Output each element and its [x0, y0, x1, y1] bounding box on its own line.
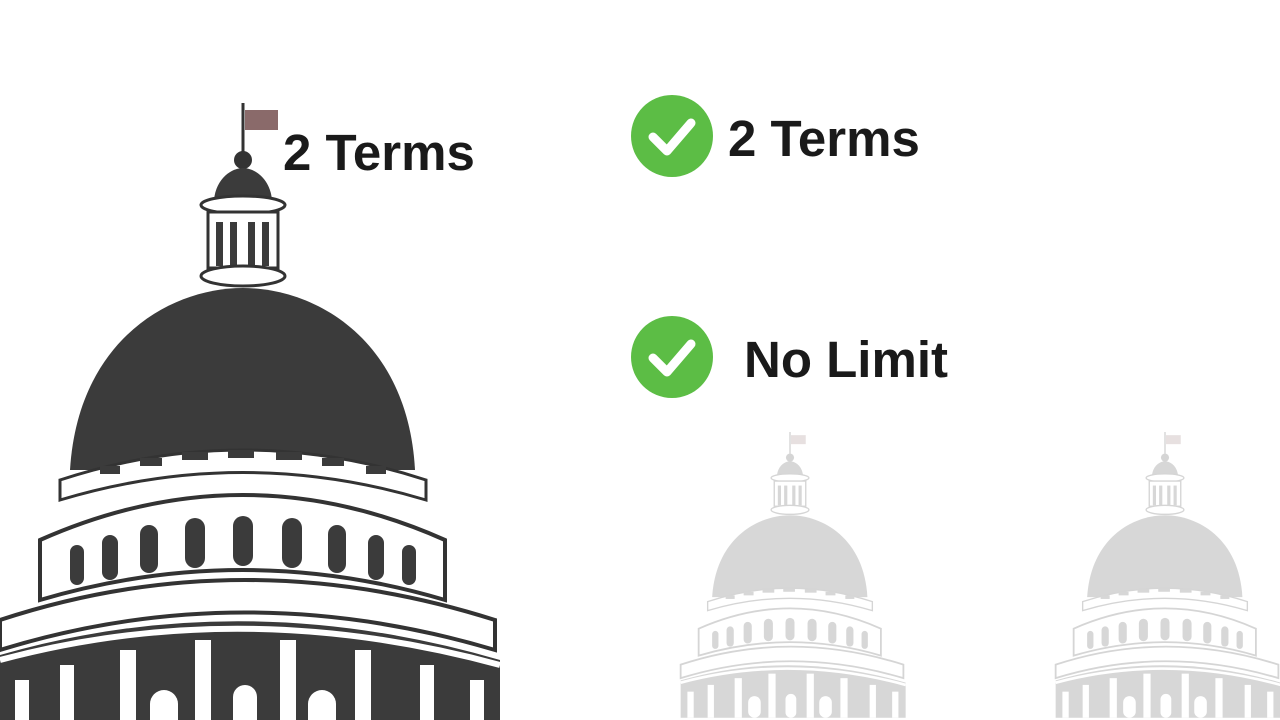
- label: 2 Terms near dome: 2 Terms: [283, 124, 475, 181]
- icon: check: [631, 316, 713, 398]
- icon: check: [631, 95, 713, 177]
- item: 2 Terms: [631, 95, 920, 177]
- item: No Limit: [631, 316, 948, 398]
- text: No Limit: No Limit: [744, 331, 948, 388]
- text: 2 Terms: 2 Terms: [728, 110, 920, 167]
